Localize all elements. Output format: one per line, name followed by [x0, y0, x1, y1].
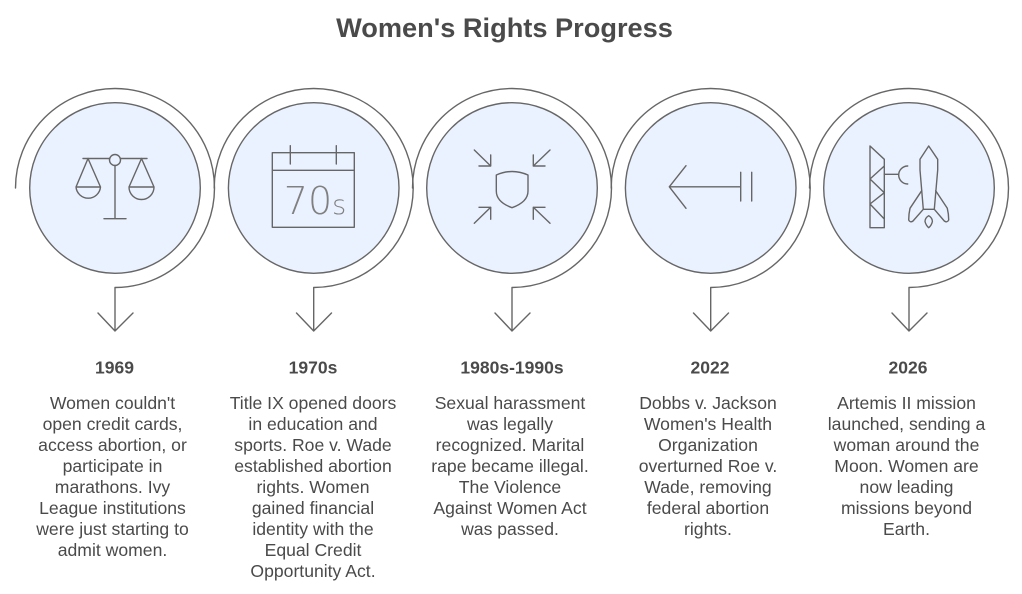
description 2026: woman around the — [833, 435, 979, 455]
description 1980s-1990s: rape became illegal. — [431, 456, 589, 476]
description 1969: access abortion, or — [38, 435, 187, 455]
circle 1 — [30, 103, 200, 273]
description 2022 — [639, 393, 777, 539]
circle 3 — [427, 103, 597, 273]
icon: launch tower and rocket — [870, 146, 949, 228]
description 1980s-1990s: was passed. — [460, 519, 559, 539]
description 1969: were just starting to — [35, 519, 189, 539]
connector arc with arrow 1 — [16, 88, 214, 331]
title: Women's Rights Progress — [336, 12, 673, 43]
description 2022: Dobbs v. Jackson — [639, 393, 777, 413]
description 2022: rights. — [684, 519, 732, 539]
description 2022: Organization — [658, 435, 758, 455]
step 2: 1970s — [214, 88, 413, 581]
description 1970s: established abortion — [234, 456, 392, 476]
description 1969 — [35, 393, 189, 560]
connector arc with arrow 3 — [412, 88, 612, 331]
description 1970s: Opportunity Act. — [250, 561, 376, 581]
year 1970s: 1970s — [289, 358, 338, 378]
description 1969: Women couldn't — [50, 393, 175, 413]
icon: scales of justice — [76, 154, 154, 219]
circle 5 — [824, 103, 994, 273]
step 3: 1980s-1990s — [412, 88, 612, 539]
step 4: 2022 — [611, 88, 810, 539]
description 1970s: rights. Women — [256, 477, 370, 497]
description 1970s: gained financial — [252, 498, 374, 518]
year 1980s-1990s: 1980s-1990s — [460, 358, 564, 378]
step 1: 1969 — [16, 88, 214, 560]
description 1970s: identity with the — [252, 519, 374, 539]
description 1970s: Title IX opened doors — [230, 393, 396, 413]
circle 2 — [228, 103, 399, 273]
description 2026: Moon. Women are — [834, 456, 979, 476]
circle 4 — [625, 103, 796, 273]
description 1980s-1990s: Sexual harassment — [435, 393, 585, 413]
description 2022: overturned Roe v. — [639, 456, 777, 476]
icon: reversal arrow — [669, 166, 752, 208]
description 1980s-1990s: Against Women Act — [433, 498, 587, 518]
description 1980s-1990s — [431, 393, 589, 539]
description 1980s-1990s: was legally — [466, 414, 553, 434]
description 2026 — [828, 393, 985, 539]
description 1969: League institutions — [39, 498, 186, 518]
connector arc with arrow 2 — [214, 88, 413, 331]
description 2022: Women's Health — [644, 414, 772, 434]
step 5: 2026 — [810, 88, 1008, 539]
connector arc with arrow 5 — [810, 88, 1008, 331]
description 2022: Wade, removing — [644, 477, 772, 497]
description 1970s: in education and — [248, 414, 378, 434]
icon: calendar 70s: 70s — [284, 179, 346, 223]
description 1980s-1990s: recognized. Marital — [436, 435, 584, 455]
description 1969: open credit cards, — [43, 414, 182, 434]
description 2026: Earth. — [883, 519, 930, 539]
description 2026: missions beyond — [841, 498, 972, 518]
description 1969: marathons. Ivy — [55, 477, 170, 497]
year 2026: 2026 — [889, 358, 928, 378]
description 1969: admit women. — [58, 540, 167, 560]
icon: shield with arrows — [474, 150, 550, 223]
year 2022: 2022 — [691, 358, 730, 378]
icon: calendar 70s — [272, 146, 354, 227]
description 2026: now leading — [860, 477, 953, 497]
description 1970s — [230, 393, 396, 581]
description 2022: federal abortion — [647, 498, 769, 518]
year 1969: 1969 — [95, 358, 134, 378]
description 2026: Artemis II mission — [837, 393, 976, 413]
description 1970s: sports. Roe v. Wade — [234, 435, 392, 455]
description 1980s-1990s: The Violence — [459, 477, 561, 497]
description 1969: participate in — [63, 456, 162, 476]
description 1970s: Equal Credit — [265, 540, 362, 560]
description 2026: launched, sending a — [828, 414, 985, 434]
connector arc with arrow 4 — [611, 88, 810, 331]
